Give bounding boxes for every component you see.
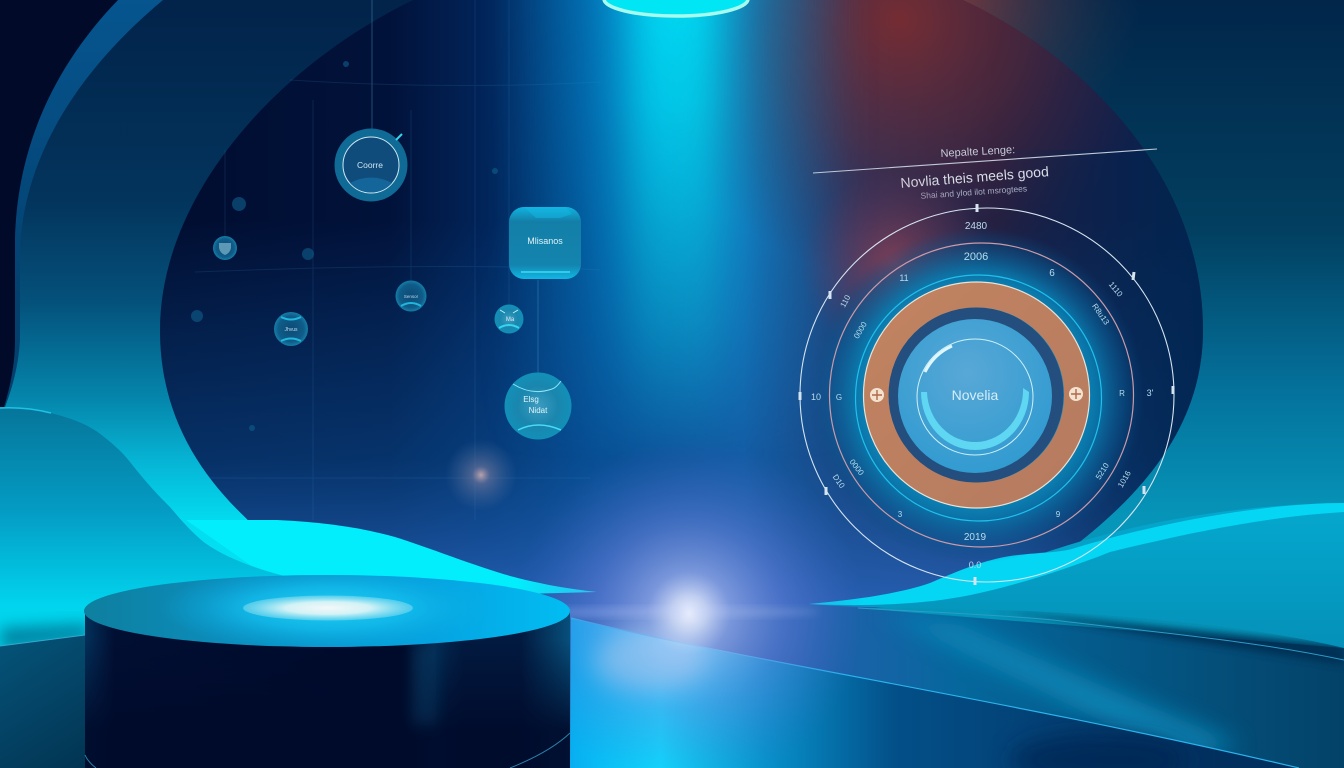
chart glow (800, 170, 1144, 563)
heading block: Shai and ylod ilot msrogtees (920, 183, 1027, 201)
right wave (809, 503, 1344, 648)
ring labels: 2480 (965, 221, 988, 232)
floor: bright front (570, 608, 1344, 768)
flare (514, 438, 864, 768)
ring labels: 0000 (852, 320, 869, 340)
ring labels (811, 221, 1154, 570)
floor: left (0, 624, 90, 768)
ring labels: 1110 (1107, 280, 1125, 299)
ring labels: R8u13 (1090, 302, 1111, 327)
ring labels: 2019 (964, 532, 987, 543)
node: Elsg Nidat: Nidat (529, 406, 548, 415)
outer ring (800, 204, 1174, 585)
heading block: Nepalte Lenge: (940, 144, 1015, 160)
ring labels: 10 (811, 392, 821, 402)
heading block (813, 144, 1157, 201)
node: Elsg Nidat (504, 280, 572, 440)
podium (84, 575, 570, 768)
light beam (504, 0, 847, 436)
pale glow orb (445, 439, 517, 511)
panel: left outer arch (0, 0, 700, 768)
node: Sensor (396, 280, 426, 312)
ring labels: 110 (838, 293, 853, 309)
ring labels: R (1119, 389, 1125, 398)
orange ring (876, 295, 1076, 495)
inner disc (898, 319, 1052, 473)
panel: right outer area (700, 0, 1344, 768)
ring labels: 0.0 (969, 560, 981, 570)
faint dots (191, 61, 498, 431)
floor: right mid zone (570, 604, 1344, 768)
ring labels: D10 (831, 473, 847, 490)
left wave (0, 407, 597, 660)
node: Jhvus: Jhvus (284, 327, 298, 333)
core rings (917, 339, 1033, 455)
pink ring (830, 243, 1134, 547)
plus icon left (870, 388, 884, 402)
node: Sensor: Sensor (404, 294, 419, 299)
ring labels: 3 (898, 510, 903, 519)
plus icon right (1069, 387, 1083, 401)
ring labels: 2006 (964, 251, 988, 263)
node: Ma (494, 304, 524, 334)
ring labels: 1016 (1116, 469, 1133, 489)
ring labels: 3' (1147, 388, 1154, 398)
center label: Novelia (952, 387, 999, 403)
node: Coorre (334, 0, 408, 202)
top light ring (603, 0, 749, 16)
node: small shield icon (213, 236, 237, 260)
ring labels: 9 (1056, 510, 1061, 519)
radial chart (800, 170, 1174, 585)
node: Mlisanos (509, 207, 581, 279)
heading block: Novlia theis meels good (900, 163, 1049, 191)
node: Mlisanos: Mlisanos (527, 236, 563, 246)
node: Coorre: Coorre (357, 160, 383, 170)
node: Elsg Nidat: Elsg (523, 395, 539, 404)
ring labels: 5210 (1094, 461, 1111, 481)
dark ring (888, 308, 1064, 482)
node: Ma: Ma (506, 317, 515, 323)
ring labels: 11 (899, 273, 909, 283)
cyan ring (856, 275, 1102, 521)
ring labels: 0000 (848, 458, 866, 478)
grid lines (195, 0, 600, 520)
node: Jhvus (274, 312, 308, 346)
panel: central dark oval (160, 0, 1203, 618)
ring labels: 6 (1049, 268, 1055, 279)
ring labels: G (836, 393, 842, 402)
orange ring rim (864, 282, 1090, 508)
